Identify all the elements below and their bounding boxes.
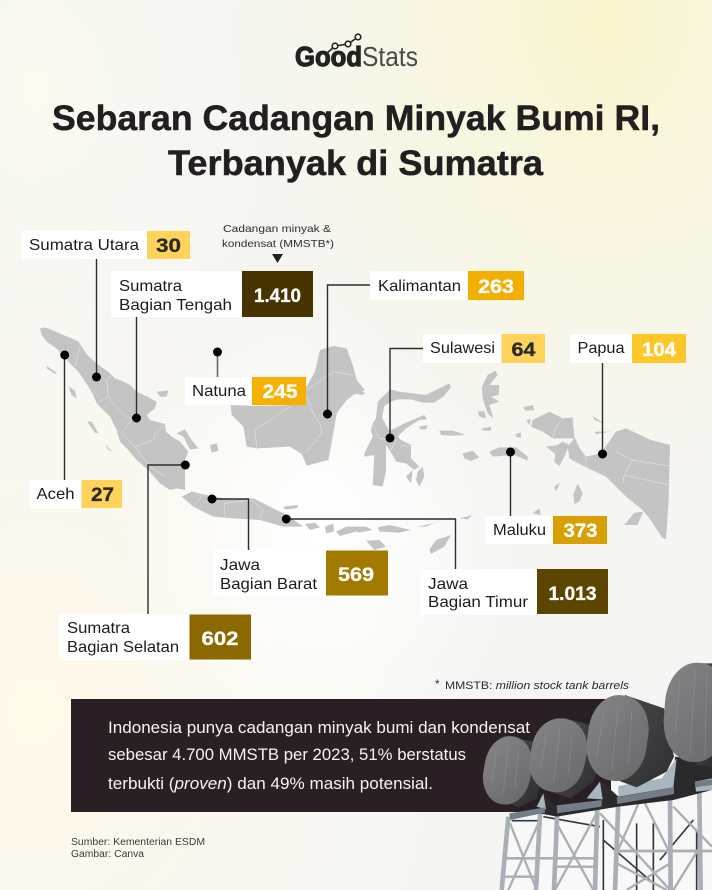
tank 4	[661, 661, 712, 767]
callout: Sumatra Bagian Tengah: Bagian Tengah	[119, 297, 232, 314]
callout: Maluku	[485, 516, 607, 544]
callout: Jawa Bagian Barat: 569	[338, 565, 374, 586]
callout: Jawa Bagian Timur: Jawa	[428, 576, 468, 593]
tower frame	[502, 792, 712, 890]
tower background	[502, 783, 712, 890]
logo: GoodStats: Good	[295, 41, 362, 72]
callout: Jawa Bagian Timur	[420, 569, 608, 615]
title	[52, 99, 660, 183]
callout: Papua	[570, 334, 686, 363]
tank 1	[478, 732, 541, 808]
callout: Maluku: Maluku	[493, 522, 546, 539]
footnote: MMSTB: MMSTB: million stock tank barrels	[445, 680, 630, 692]
callout: Natuna: Natuna	[192, 383, 246, 400]
photo: oil tanks on steel tower	[478, 661, 712, 890]
callout: Aceh	[29, 480, 122, 508]
callout: Sumatra Bagian Tengah: 1.410	[254, 286, 301, 307]
callout: Kalimantan	[370, 271, 524, 300]
summary panel: sebesar 4.700 MMSTB per 2023, 51% berstatus	[108, 746, 466, 764]
logo: GoodStats	[295, 34, 418, 72]
map of Indonesia	[40, 327, 670, 554]
callout: Aceh: 27	[91, 485, 114, 506]
callout: Sumatra Bagian Selatan	[59, 614, 251, 660]
legend note: cadangan minyak & kondensat: Cadangan minyak &	[223, 223, 331, 235]
title: Terbanyak di Sumatra	[168, 144, 544, 183]
tank 3	[582, 691, 674, 787]
legend note: cadangan minyak & kondensat: kondensat (MMSTB*)	[222, 238, 334, 250]
connector lines	[64, 259, 602, 614]
source credits: Gambar: Canva	[71, 849, 144, 860]
callout: Sumatra Bagian Selatan: 602	[202, 629, 238, 650]
callout: Maluku: 373	[564, 521, 598, 542]
callout: Jawa Bagian Barat	[213, 550, 388, 596]
title: Sebaran Cadangan Minyak Bumi RI,	[52, 99, 660, 138]
callout: Sumatra Utara	[22, 231, 190, 259]
support platform	[540, 757, 712, 817]
callout: Kalimantan: 263	[478, 277, 514, 298]
map location dots	[60, 348, 607, 524]
logo: GoodStats: Stats	[362, 41, 418, 72]
legend note: cadangan minyak & kondensat	[222, 223, 334, 263]
callout: Sumatra Bagian Tengah	[111, 271, 313, 317]
footnote: MMSTB: *	[435, 679, 440, 691]
summary panel: terbukti (proven) dan 49% masih potensial.	[108, 775, 433, 793]
source credits: Sumber: Kementerian ESDM	[71, 837, 205, 848]
callout: Natuna	[185, 377, 306, 405]
callout: Jawa Bagian Timur: 1.013	[548, 584, 596, 605]
callout: Kalimantan: Kalimantan	[378, 278, 461, 295]
callout: Sumatra Bagian Selatan: Sumatra	[67, 620, 130, 637]
callout: Sumatra Bagian Selatan: Bagian Selatan	[67, 639, 179, 656]
source credits	[71, 837, 205, 860]
summary panel: Indonesia punya cadangan minyak bumi dan kondensat	[108, 719, 530, 737]
callout: Papua: Papua	[578, 340, 625, 357]
callout: Jawa Bagian Barat: Bagian Barat	[220, 576, 318, 593]
callout: Sulawesi: 64	[512, 340, 536, 361]
callout: Sulawesi: Sulawesi	[430, 340, 495, 357]
callout: Sumatra Utara: 30	[156, 236, 181, 257]
callout: Jawa Bagian Barat: Jawa	[220, 557, 260, 574]
callout: Sumatra Utara: Sumatra Utara	[29, 237, 139, 254]
tank 2	[524, 713, 599, 798]
summary panel	[71, 699, 611, 812]
map: western islands	[40, 327, 365, 536]
callout: Papua: 104	[642, 340, 676, 361]
callout: Sumatra Bagian Tengah: Sumatra	[119, 278, 182, 295]
callout: Natuna: 245	[262, 382, 298, 403]
callout: Jawa Bagian Timur: Bagian Timur	[428, 594, 529, 611]
map: eastern islands	[356, 371, 670, 554]
callout: Sulawesi	[423, 334, 545, 363]
callout: Aceh: Aceh	[36, 486, 74, 503]
